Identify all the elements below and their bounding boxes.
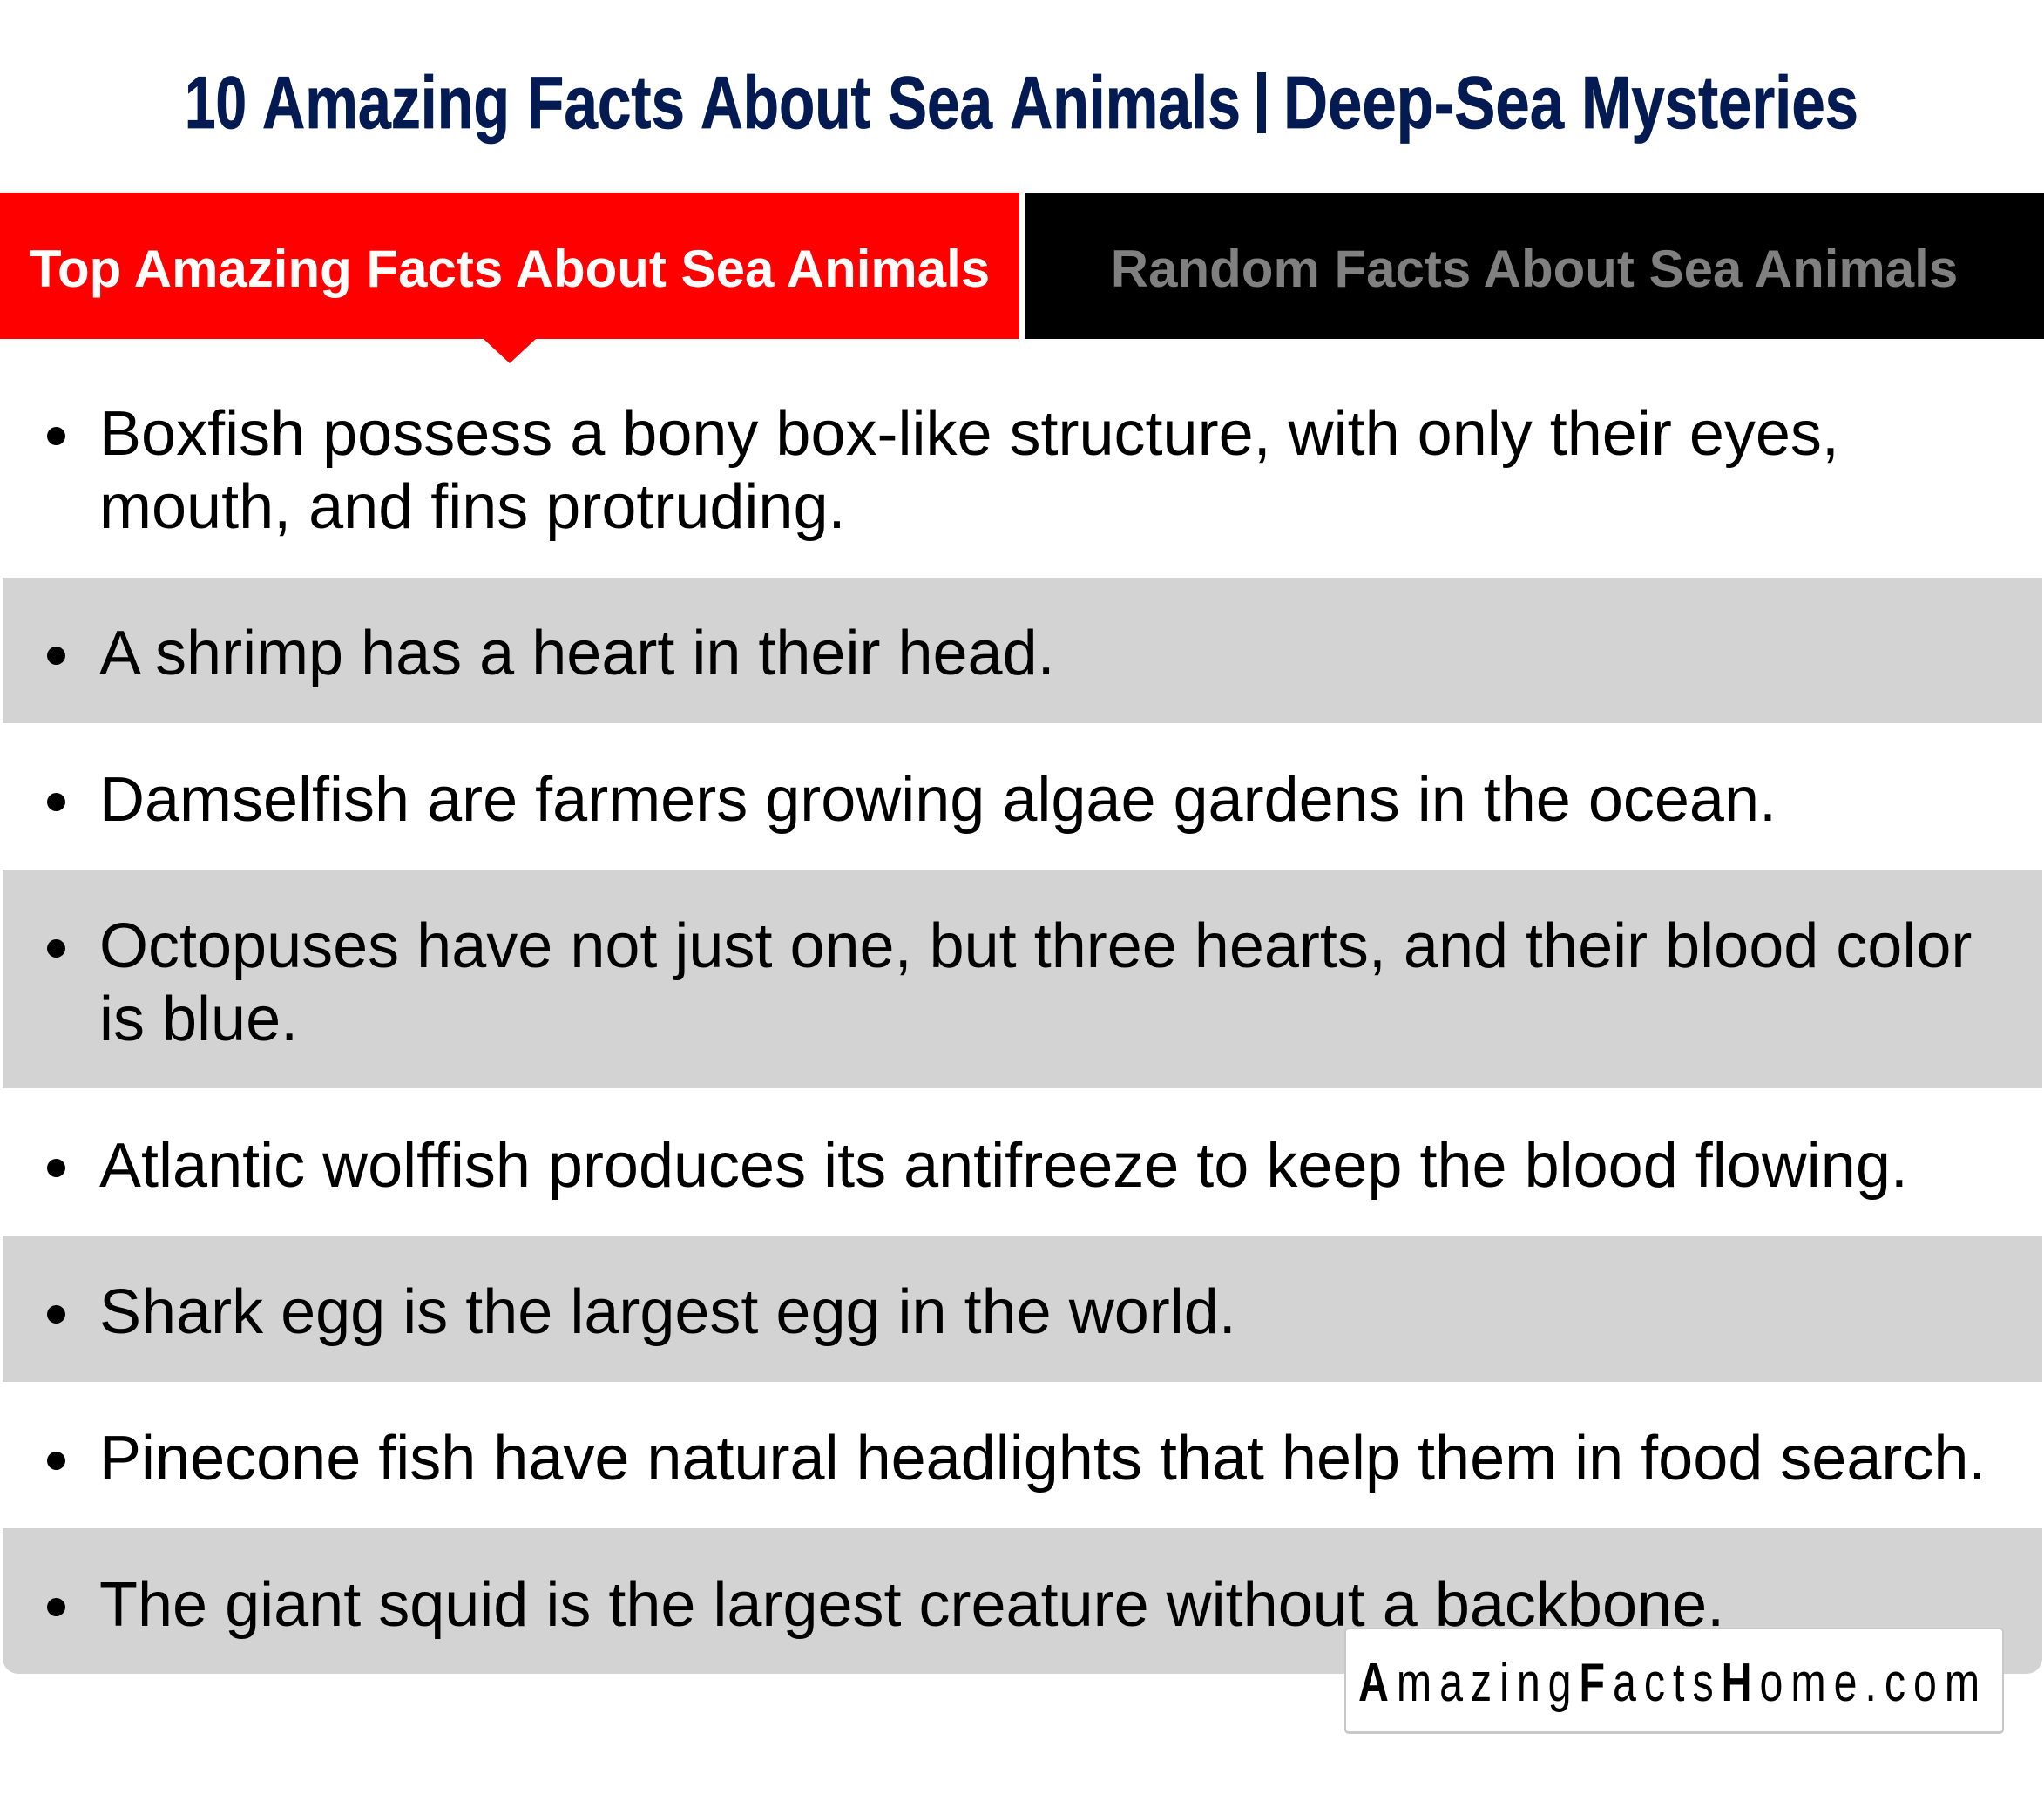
watermark text: AmazingFactsHome.com bbox=[1358, 1652, 1987, 1712]
title: Mysteries bbox=[1581, 62, 1858, 145]
row background 8 bbox=[3, 1528, 2042, 1674]
fact 1: mouth, and fins protruding. bbox=[99, 472, 846, 542]
fact 4: is blue. bbox=[99, 985, 298, 1054]
row background 4 bbox=[3, 870, 2042, 1088]
watermark box bbox=[1344, 1628, 2004, 1734]
tab pointer bbox=[484, 339, 536, 363]
tab: random facts: Random Facts About Sea Animals bbox=[1111, 240, 1958, 298]
fact 1 bbox=[47, 399, 1839, 542]
title: Facts bbox=[527, 62, 685, 145]
fact 5: Atlantic wolffish produces its antifreeze to keep the blood flowing. bbox=[99, 1131, 1908, 1201]
title: About bbox=[701, 62, 870, 145]
fact 1: Boxfish possess a bony box-like structure, with only their eyes, bbox=[99, 399, 1839, 469]
row background 6 bbox=[3, 1236, 2042, 1382]
fact 7: Pinecone fish have natural headlights that help them in food search. bbox=[99, 1424, 1986, 1493]
title bbox=[185, 62, 1858, 145]
fact 3: Damselfish are farmers growing algae gardens in the ocean. bbox=[99, 765, 1777, 835]
title: Animals bbox=[1010, 62, 1241, 145]
tab: top amazing facts (active): Top Amazing Facts About Sea Animals bbox=[30, 240, 990, 298]
fact 4 bbox=[47, 911, 1972, 1054]
title: Sea bbox=[888, 62, 993, 145]
fact 4: Octopuses have not just one, but three hearts, and their blood color bbox=[99, 911, 1972, 981]
fact 2: A shrimp has a heart in their head. bbox=[99, 619, 1055, 688]
tab: top amazing facts (active) bbox=[0, 193, 1019, 339]
fact 8: The giant squid is the largest creature without a backbone. bbox=[99, 1570, 1724, 1640]
row background 2 bbox=[3, 578, 2042, 723]
title: Amazing bbox=[262, 62, 510, 145]
title: 10 bbox=[185, 62, 247, 145]
tab: random facts bbox=[1025, 193, 2044, 339]
fact 6: Shark egg is the largest egg in the world. bbox=[99, 1277, 1236, 1347]
title: Deep-Sea bbox=[1283, 62, 1565, 145]
